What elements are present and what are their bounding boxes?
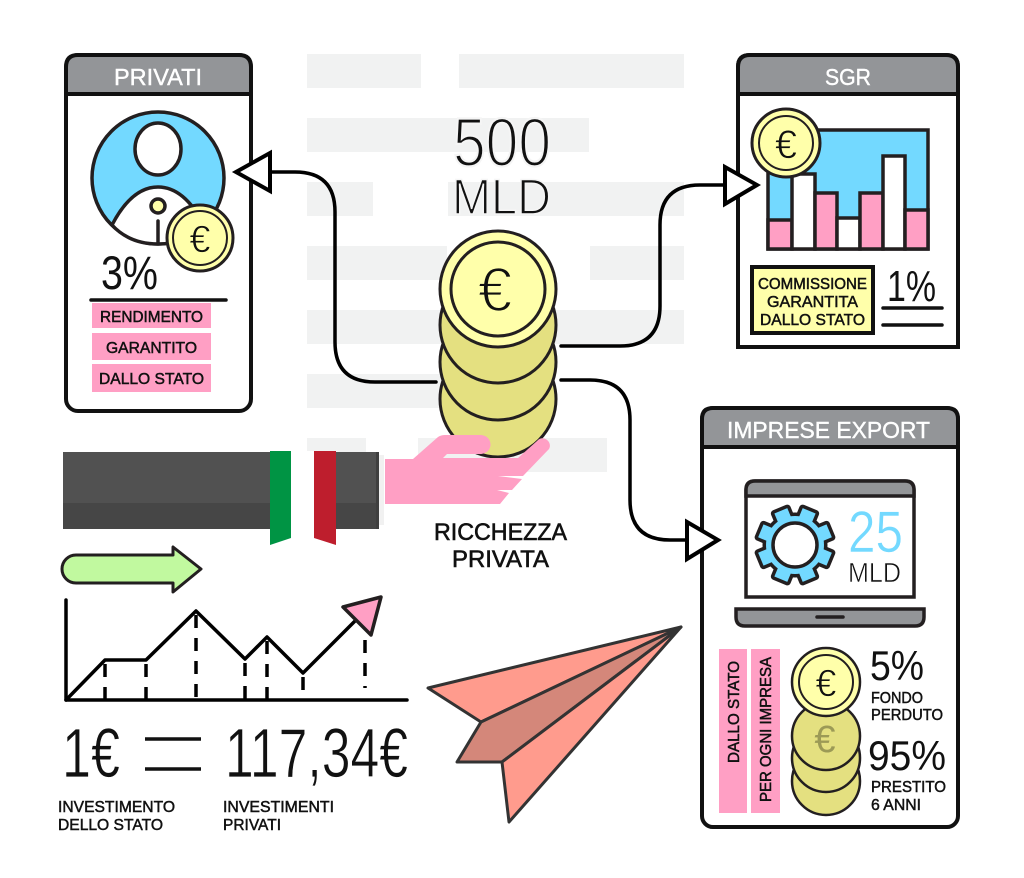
arm with Italian flag cuff — [63, 435, 550, 545]
icon: coin stack: € — [815, 663, 837, 705]
icon: euro coin — [167, 205, 233, 271]
bar chart — [768, 130, 928, 249]
caption: ricchezza privata: RICCHEZZA — [434, 519, 567, 546]
label: rendimento garantito dallo stato: RENDIMENTO — [100, 309, 203, 326]
connector arrow: to SGR — [561, 167, 757, 346]
value: 95% prestito 6 anni: 95% — [868, 732, 946, 779]
label: rendimento garantito dallo stato: GARANTITO — [106, 340, 197, 357]
panel frame — [66, 55, 251, 411]
heading: SGR: SGR — [825, 64, 871, 90]
equation: 1€ = 117,34€: 117,34€ — [225, 714, 408, 792]
caption: investimento dello stato: DELLO STATO — [58, 817, 163, 834]
heading: Privati: PRIVATI — [114, 64, 202, 90]
icon: gear — [758, 508, 832, 582]
connector arrow: to Privati — [236, 153, 436, 382]
label: rendimento garantito dallo stato — [92, 303, 211, 392]
panel frame — [702, 408, 958, 827]
label: commissione garantita dallo stato: GARANTITA — [767, 294, 858, 311]
value: 5% fondo perduto: FONDO — [871, 690, 923, 707]
heading: Imprese Export: IMPRESE EXPORT — [727, 417, 930, 443]
icon: coin stack — [440, 231, 556, 457]
value: 500 MLD: MLD — [452, 169, 551, 225]
panel frame — [738, 55, 958, 347]
caption: investimenti privati — [223, 799, 334, 834]
value: 3%: 3% — [101, 246, 158, 299]
value: 95% prestito 6 anni: 6 ANNI — [871, 797, 921, 814]
caption: investimenti privati: INVESTIMENTI — [223, 799, 334, 816]
value: 500 MLD: 500 — [453, 104, 551, 181]
value: 1%: 1% — [887, 262, 936, 311]
label: dallo stato: DALLO STATO — [726, 661, 743, 763]
icon: paper plane — [428, 627, 681, 822]
icon: coin stack: € — [478, 256, 512, 325]
value: 25 MLD: MLD — [848, 557, 901, 588]
icon: person avatar — [92, 112, 224, 244]
arrowhead — [343, 597, 381, 635]
panel: Privati — [66, 55, 251, 411]
icon: euro coin — [752, 109, 820, 177]
icon: coin stack — [792, 648, 860, 815]
connector arrow: to Imprese Export — [561, 380, 718, 559]
label: commissione garantita dallo stato: COMMISSIONE — [758, 276, 867, 293]
sleeve — [63, 452, 379, 529]
label: per ogni impresa: PER OGNI IMPRESA — [758, 657, 775, 802]
caption: ricchezza privata — [434, 519, 567, 573]
caption: ricchezza privata: PRIVATA — [452, 546, 549, 573]
panel header — [66, 55, 251, 94]
equation: 1€ = 117,34€: 1€ — [62, 714, 120, 792]
icon: coin stack: € — [814, 719, 836, 761]
icon: euro coin: € — [775, 123, 797, 167]
value: 500 MLD — [452, 104, 551, 225]
caption: investimenti privati: PRIVATI — [223, 817, 281, 834]
value: 95% prestito 6 anni — [868, 732, 946, 814]
value: 25 MLD: 25 — [848, 500, 903, 565]
icon: laptop — [736, 481, 924, 626]
value: 95% prestito 6 anni: PRESTITO — [871, 779, 946, 796]
value: 5% fondo perduto: 5% — [870, 642, 924, 689]
label: rendimento garantito dallo stato: DALLO STATO — [99, 371, 204, 388]
caption: investimento dello stato — [58, 799, 175, 834]
value: 25 MLD — [848, 500, 903, 588]
panel: Imprese Export — [702, 408, 958, 827]
panel header — [702, 408, 958, 447]
caption: investimento dello stato: INVESTIMENTO — [58, 799, 175, 816]
flag band — [291, 451, 314, 541]
value: 5% fondo perduto — [870, 642, 943, 724]
label: commissione garantita dallo stato: DALLO STATO — [760, 312, 865, 329]
panel: SGR — [738, 55, 958, 347]
label: per ogni impresa — [751, 649, 780, 813]
hand — [385, 435, 550, 504]
equation: 1€ = 117,34€ — [62, 714, 408, 792]
line chart — [66, 597, 407, 700]
icon: euro coin: € — [189, 219, 211, 261]
panel header — [738, 55, 958, 94]
arrow: green — [62, 547, 201, 592]
value: 5% fondo perduto: PERDUTO — [871, 707, 943, 724]
label: dallo stato — [719, 649, 747, 813]
label: commissione garantita dallo stato — [752, 267, 873, 333]
